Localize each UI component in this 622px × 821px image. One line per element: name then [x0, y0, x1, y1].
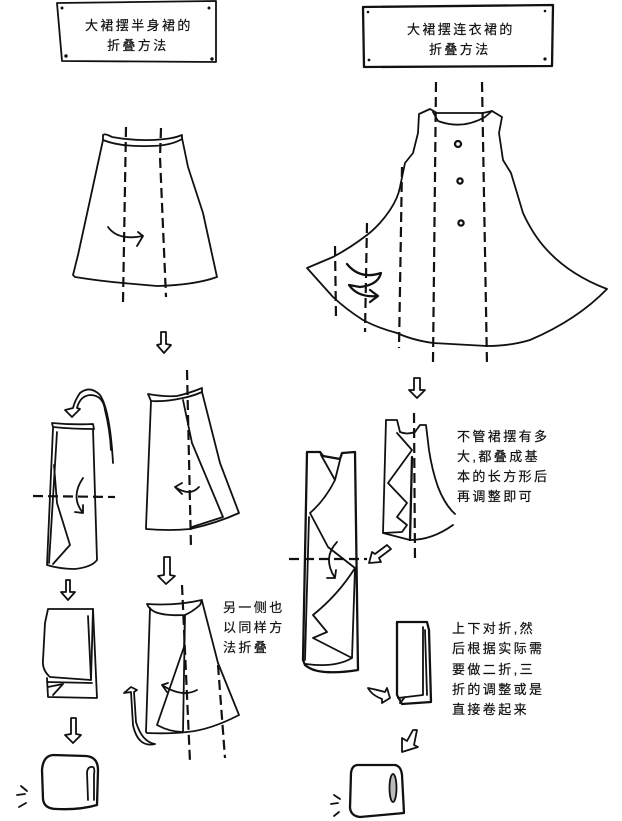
title placard: skirt	[57, 1, 216, 62]
arrow: to skirt step 2	[157, 332, 171, 353]
note: other side: 法折叠	[223, 640, 269, 655]
skirt final roll	[17, 755, 98, 809]
arrow: to dress final roll	[402, 730, 418, 752]
sparks	[331, 795, 340, 816]
skirt step 1: flat skirt with fold lines	[73, 127, 217, 302]
arrow: to dress step 2	[409, 378, 425, 398]
note: fold and roll	[452, 621, 544, 717]
note: fold and roll: 折的调整或是	[452, 682, 544, 697]
arrow: to skirt step 5	[61, 580, 75, 600]
fold arrow	[162, 683, 197, 693]
big curved arrow: fold up	[124, 687, 155, 745]
note: fold and roll: 直接卷起来	[452, 702, 529, 717]
fold arrow	[108, 227, 143, 246]
note: fold and roll: 上下对折,然	[452, 621, 535, 636]
sparks	[17, 786, 27, 807]
title placard: skirt: 大裙摆半身裙的	[85, 18, 193, 33]
skirt step 5: folded in half	[43, 609, 97, 698]
note: other side: 另一侧也	[223, 600, 285, 615]
arrow: to skirt step 3	[158, 557, 175, 584]
arrow: to skirt step 6	[65, 718, 81, 743]
arrow: to dress step 3	[369, 545, 391, 563]
title placard: dress: 大裙摆连衣裙的	[407, 22, 515, 37]
title placard: dress	[363, 5, 553, 67]
note: any skirt size	[457, 429, 549, 504]
skirt step 3: other side folding	[146, 585, 239, 762]
title placard: skirt: 折叠方法	[107, 38, 169, 53]
fold arrow	[75, 478, 83, 513]
dress step 3: long strip with fold line	[289, 452, 367, 672]
dress final roll	[331, 765, 404, 817]
note: any skirt size: 本的长方形后	[457, 469, 549, 484]
note: fold and roll: 后根据实际需	[452, 641, 544, 656]
title placard: dress: 折叠方法	[429, 42, 491, 57]
dress step 4: folded rectangle	[397, 622, 431, 704]
note: other side: 以同样方	[223, 620, 285, 635]
big curved arrow: onto strip	[65, 389, 113, 463]
note: any skirt size: 不管裙摆有多	[457, 429, 549, 444]
note: any skirt size: 再调整即可	[457, 489, 534, 504]
note: fold and roll: 要做二折,三	[452, 662, 535, 677]
dress step 1: flat dress with fold lines	[307, 82, 607, 365]
fold arrow	[175, 483, 199, 494]
skirt step 4: long strip with fold line	[33, 423, 115, 569]
dress step 2: folded sides with hem	[383, 413, 455, 562]
arrow: dress step 3 to 4	[368, 688, 390, 703]
buttons	[455, 141, 461, 147]
note: other side	[223, 600, 285, 655]
skirt step 2: left side folded	[146, 370, 239, 548]
note: any skirt size: 大,都叠成基	[457, 449, 540, 464]
fold arrow	[327, 542, 337, 578]
fold arrows	[347, 264, 381, 302]
